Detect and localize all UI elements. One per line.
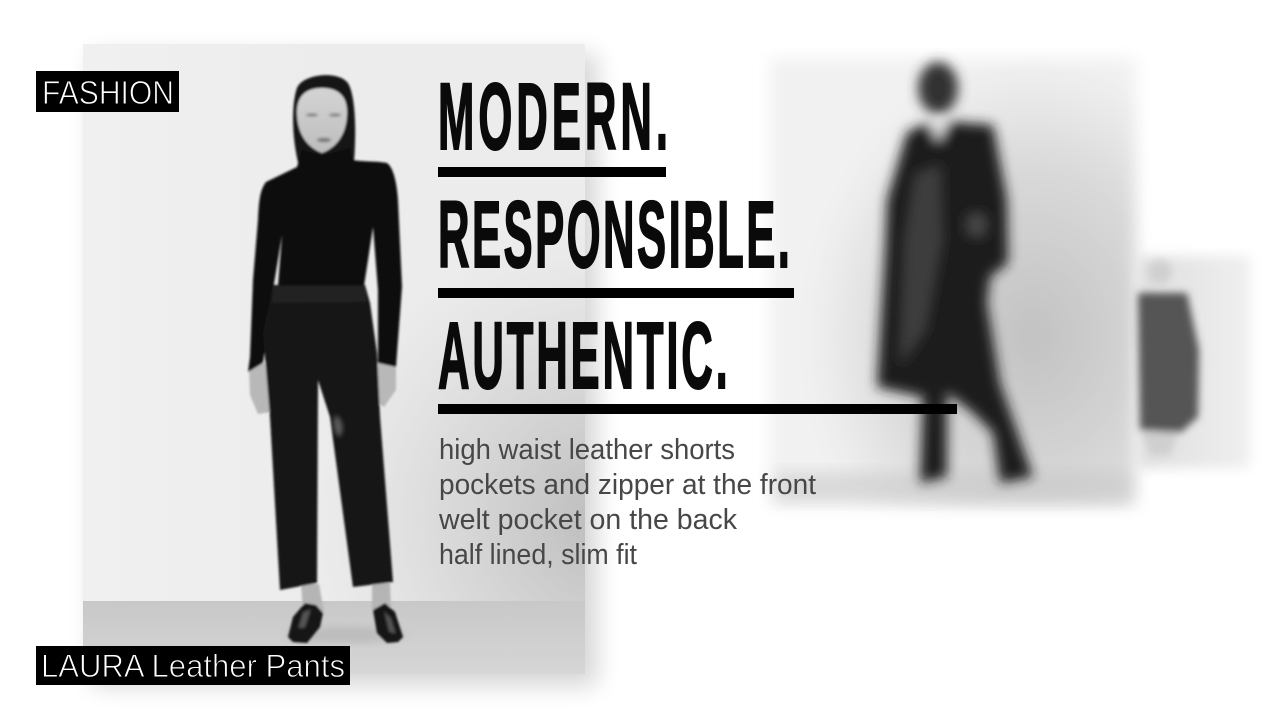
headline: authentic: AUTHENTIC. [438,302,728,409]
rule under modern [438,167,666,177]
description line 3: welt pocket on the back [438,504,737,536]
panel: third blurred photo [1138,256,1250,468]
description line 4: half lined, slim fit [439,539,637,571]
sweater [248,148,402,372]
product description [438,434,816,571]
panel: main photo [83,44,597,686]
ankles [301,584,324,612]
label: fashion: FASHION [42,74,174,111]
shoe shadows [285,627,405,643]
headline: modern: MODERN. [438,63,668,170]
rule under authentic [438,404,957,414]
rule under responsible [438,288,794,298]
hands [249,362,271,414]
hair [293,75,355,166]
blurred coat figure [877,62,1033,483]
label: product name: LAURA Leather Pants [41,648,345,684]
shoes [288,603,323,643]
panel: second blurred photo [770,58,1136,506]
headline: responsible: RESPONSIBLE. [438,181,790,288]
description line 2: pockets and zipper at the front [439,469,816,501]
model [248,75,403,643]
description line 1: high waist leather shorts [439,434,735,466]
trousers [263,285,393,590]
headline [438,63,790,409]
face [297,88,347,153]
blurred small figure [1138,260,1199,455]
